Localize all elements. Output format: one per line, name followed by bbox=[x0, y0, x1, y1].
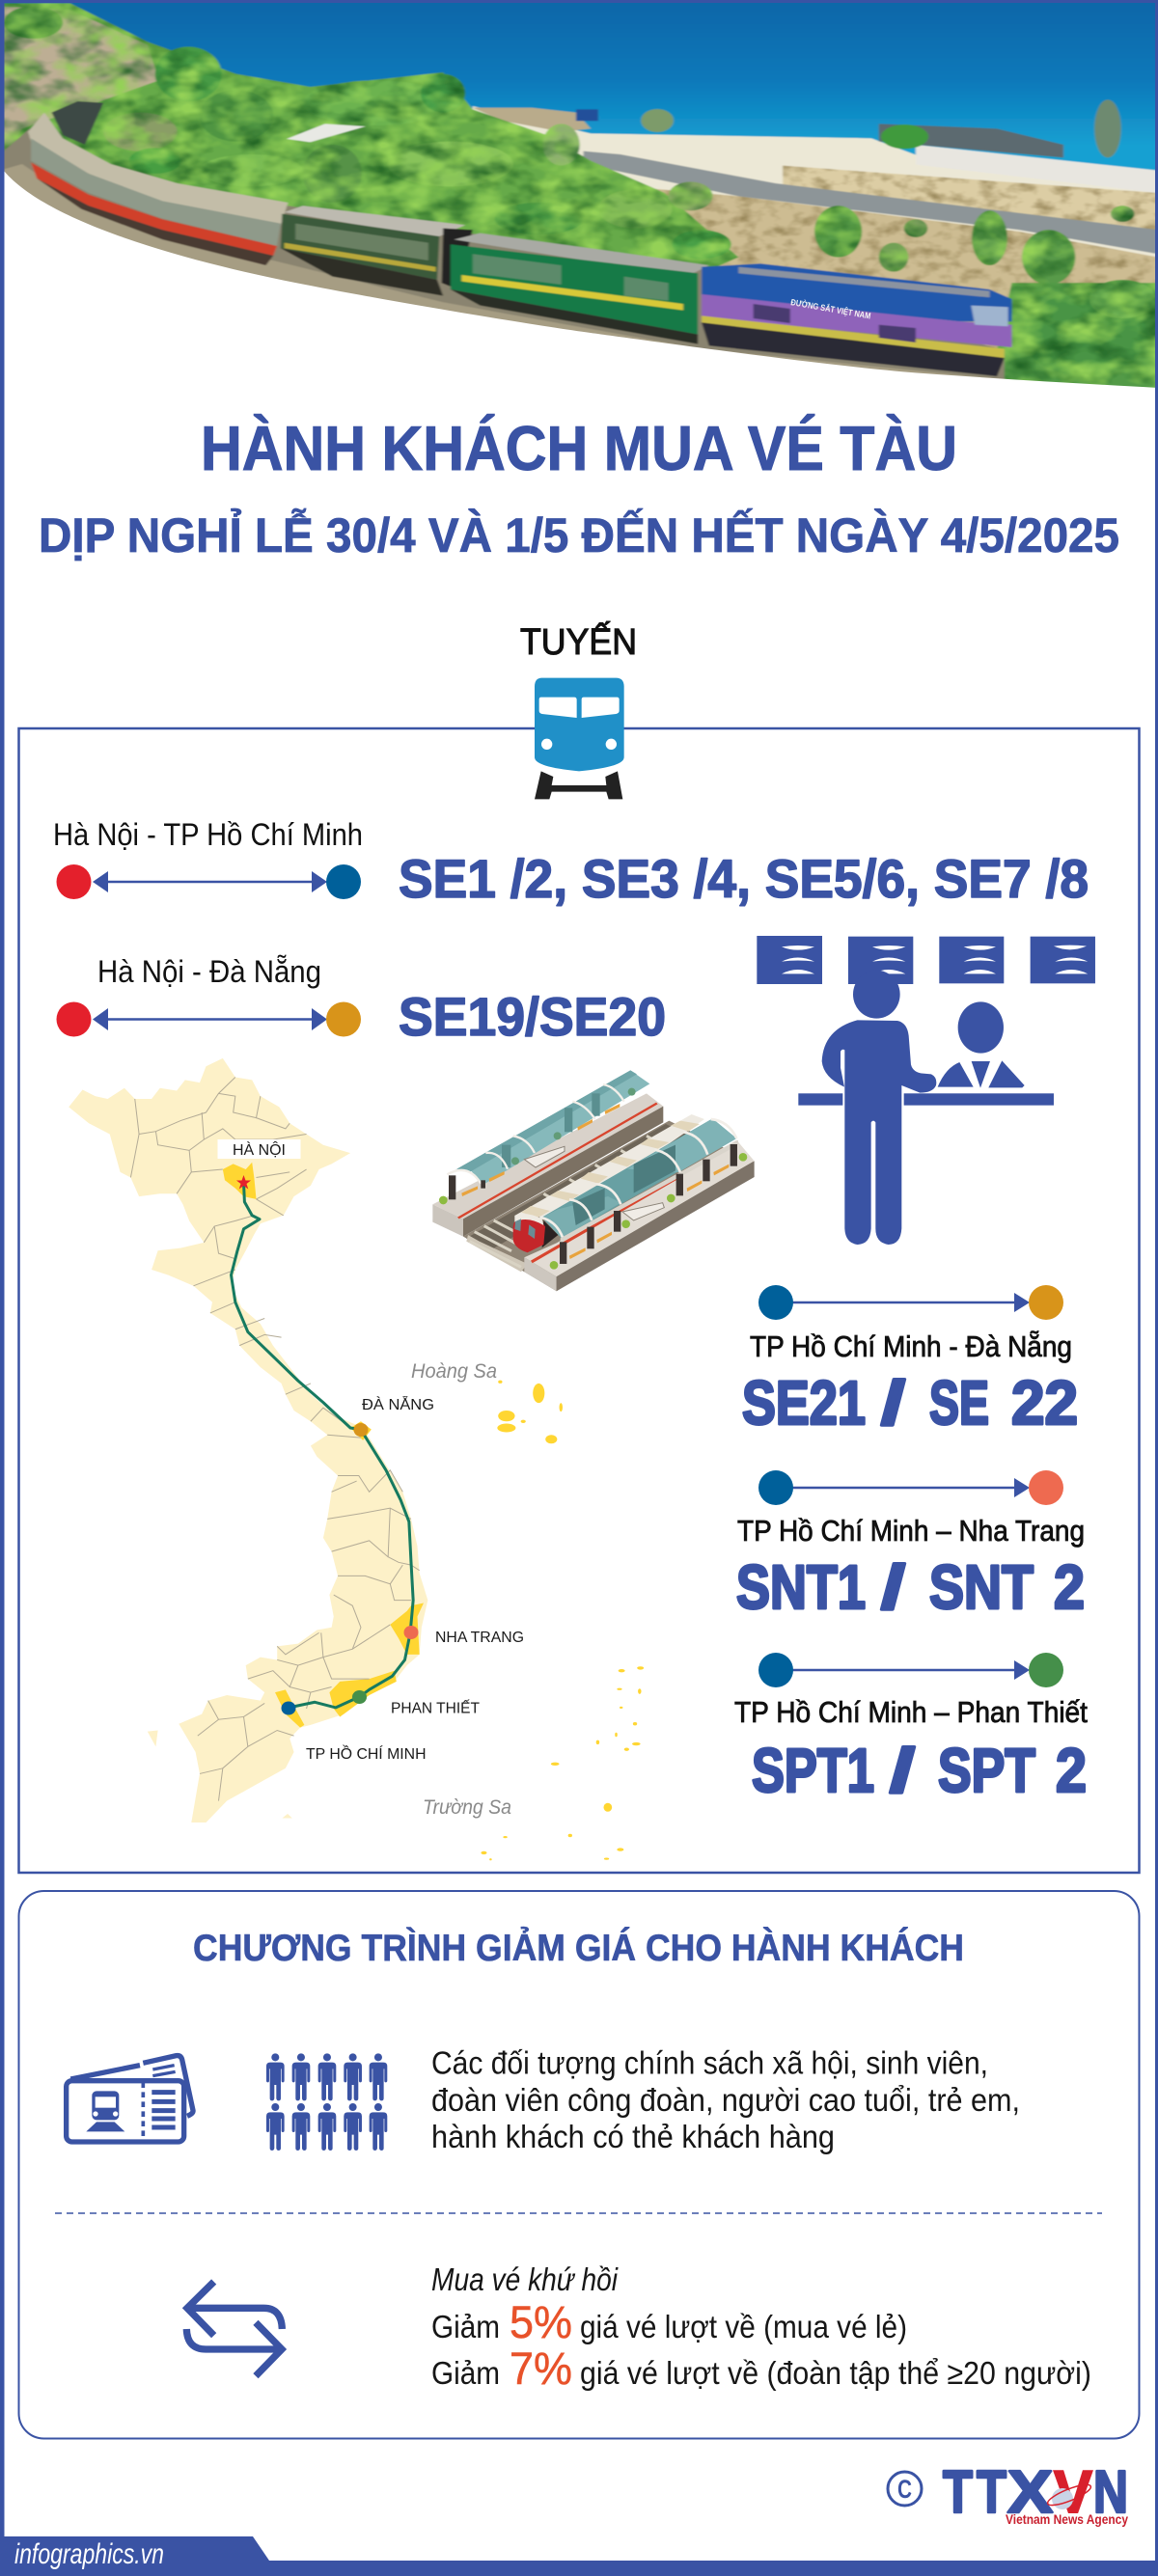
panel: routes bbox=[19, 728, 1139, 1873]
star marker: Hà Nội bbox=[236, 1175, 251, 1189]
route: TP Hồ Chí Minh - Đà Nẵng: SE21 bbox=[742, 1368, 866, 1438]
panel: discount programme bbox=[19, 1891, 1139, 2439]
route: Hà Nội - Đà Nẵng bbox=[56, 954, 361, 1036]
logo: copyright and TTXVN: Vietnam News Agency bbox=[1006, 2511, 1128, 2527]
header photo: train along the coast bbox=[0, 0, 1158, 405]
panel heading: CHƯƠNG TRÌNH GIẢM GIÁ CHO HÀNH KHÁCH bbox=[193, 1927, 964, 1969]
logo: copyright and TTXVN: T bbox=[977, 2459, 1006, 2526]
footer band with website: infographics.vn bbox=[14, 2538, 164, 2570]
train codes: Hà Nội - Đà Nẵng: SE19/SE20 bbox=[399, 986, 666, 1047]
map of Vietnam with railway route bbox=[69, 1058, 644, 1860]
icon: group of people bbox=[266, 2053, 387, 2151]
route: TP Hồ Chí Minh - Đà Nẵng: TP Hồ Chí Minh - Đà Nẵng bbox=[750, 1329, 1072, 1363]
route: TP Hồ Chí Minh - Đà Nẵng: 22 bbox=[1011, 1368, 1078, 1438]
logo: copyright and TTXVN: T bbox=[943, 2459, 973, 2526]
logo: copyright and TTXVN: X bbox=[1007, 2459, 1053, 2526]
round trip discounts: 5% bbox=[510, 2296, 572, 2347]
illustration: isometric train station bbox=[432, 1070, 755, 1291]
round trip discounts: giá vé lượt về (đoàn tập thể ≥20 người) bbox=[580, 2355, 1091, 2391]
route: Hà Nội - Đà Nẵng: Hà Nội - Đà Nẵng bbox=[97, 954, 321, 989]
route: TP Hồ Chí Minh - Phan Thiết: 2 bbox=[1056, 1736, 1087, 1805]
map stops bbox=[282, 1423, 419, 1715]
logo: copyright and TTXVN: V bbox=[1054, 2459, 1092, 2526]
subtitle: DỊP NGHỈ LỄ 30/4 VÀ 1/5 ĐẾN HẾT NGÀY 4/5/2025 bbox=[39, 508, 1119, 562]
round trip discounts: Mua vé khứ hồi bbox=[431, 2261, 619, 2297]
route: TP Hồ Chí Minh - Phan Thiết bbox=[734, 1653, 1088, 1805]
route: TP Hồ Chí Minh - Nha Trang: SNT1 bbox=[736, 1552, 866, 1622]
eligible passengers text: hành khách có thẻ khách hàng bbox=[431, 2119, 835, 2154]
icon: ticket counter bbox=[757, 936, 1095, 1245]
eligible passengers text: Các đối tượng chính sách xã hội, sinh viên, bbox=[431, 2045, 988, 2080]
route: TP Hồ Chí Minh - Đà Nẵng: / bbox=[881, 1368, 905, 1438]
icon: tickets bbox=[67, 2056, 193, 2142]
route: TP Hồ Chí Minh - Nha Trang: 2 bbox=[1054, 1552, 1085, 1622]
map labels: NHA TRANG bbox=[435, 1630, 524, 1646]
section label: routes: TUYẾN bbox=[520, 620, 637, 663]
map labels: TP HỒ CHÍ MINH bbox=[306, 1744, 427, 1763]
map labels bbox=[218, 1139, 524, 1819]
route: TP Hồ Chí Minh - Nha Trang: TP Hồ Chí Minh – Nha Trang bbox=[737, 1514, 1085, 1548]
round trip discounts bbox=[431, 2261, 1091, 2394]
footer band with website bbox=[0, 2536, 1158, 2576]
round trip discounts: Giảm bbox=[431, 2309, 500, 2344]
route: TP Hồ Chí Minh - Đà Nẵng: SE bbox=[929, 1368, 989, 1438]
map labels: Hoàng Sa bbox=[411, 1360, 497, 1383]
round trip discounts: Giảm bbox=[431, 2355, 500, 2391]
logo: copyright and TTXVN bbox=[888, 2459, 1128, 2527]
route: TP Hồ Chí Minh - Phan Thiết: / bbox=[890, 1736, 915, 1805]
icon: train bbox=[535, 678, 624, 799]
eligible passengers text bbox=[431, 2045, 1020, 2154]
map labels: PHAN THIẾT bbox=[391, 1698, 480, 1717]
route: TP Hồ Chí Minh - Nha Trang: SNT bbox=[929, 1552, 1034, 1622]
route: Hà Nội - TP Hồ Chí Minh: Hà Nội - TP Hồ Chí Minh bbox=[53, 817, 363, 852]
route: TP Hồ Chí Minh - Phan Thiết: SPT bbox=[938, 1736, 1035, 1805]
route: TP Hồ Chí Minh - Đà Nẵng bbox=[742, 1285, 1078, 1438]
round trip discounts: giá vé lượt về (mua vé lẻ) bbox=[580, 2309, 907, 2344]
route: TP Hồ Chí Minh - Nha Trang: / bbox=[881, 1552, 905, 1622]
route: TP Hồ Chí Minh - Phan Thiết: SPT1 bbox=[752, 1736, 874, 1805]
header photo: train along the coast: ĐƯỜNG SẮT VIỆT NAM bbox=[790, 296, 871, 321]
round trip discounts: 7% bbox=[510, 2343, 572, 2394]
title: HÀNH KHÁCH MUA VÉ TÀU bbox=[201, 413, 957, 483]
map labels: ĐÀ NẴNG bbox=[362, 1395, 434, 1413]
eligible passengers text: đoàn viên công đoàn, người cao tuổi, trẻ em, bbox=[431, 2082, 1020, 2118]
logo: copyright and TTXVN: C bbox=[897, 2475, 912, 2504]
map labels: HÀ NỘI bbox=[233, 1140, 286, 1159]
map labels: Trường Sa bbox=[423, 1796, 511, 1819]
icon: return trip arrows bbox=[186, 2282, 282, 2376]
route: TP Hồ Chí Minh - Nha Trang bbox=[736, 1470, 1085, 1622]
route: TP Hồ Chí Minh - Phan Thiết: TP Hồ Chí Minh – Phan Thiết bbox=[734, 1695, 1088, 1729]
route: Hà Nội - TP Hồ Chí Minh bbox=[53, 817, 363, 899]
logo: copyright and TTXVN: N bbox=[1093, 2459, 1128, 2526]
train codes: Hà Nội - TP Hồ Chí Minh: SE1 /2, SE3 /4, SE5/6, SE7 /8 bbox=[399, 848, 1089, 909]
